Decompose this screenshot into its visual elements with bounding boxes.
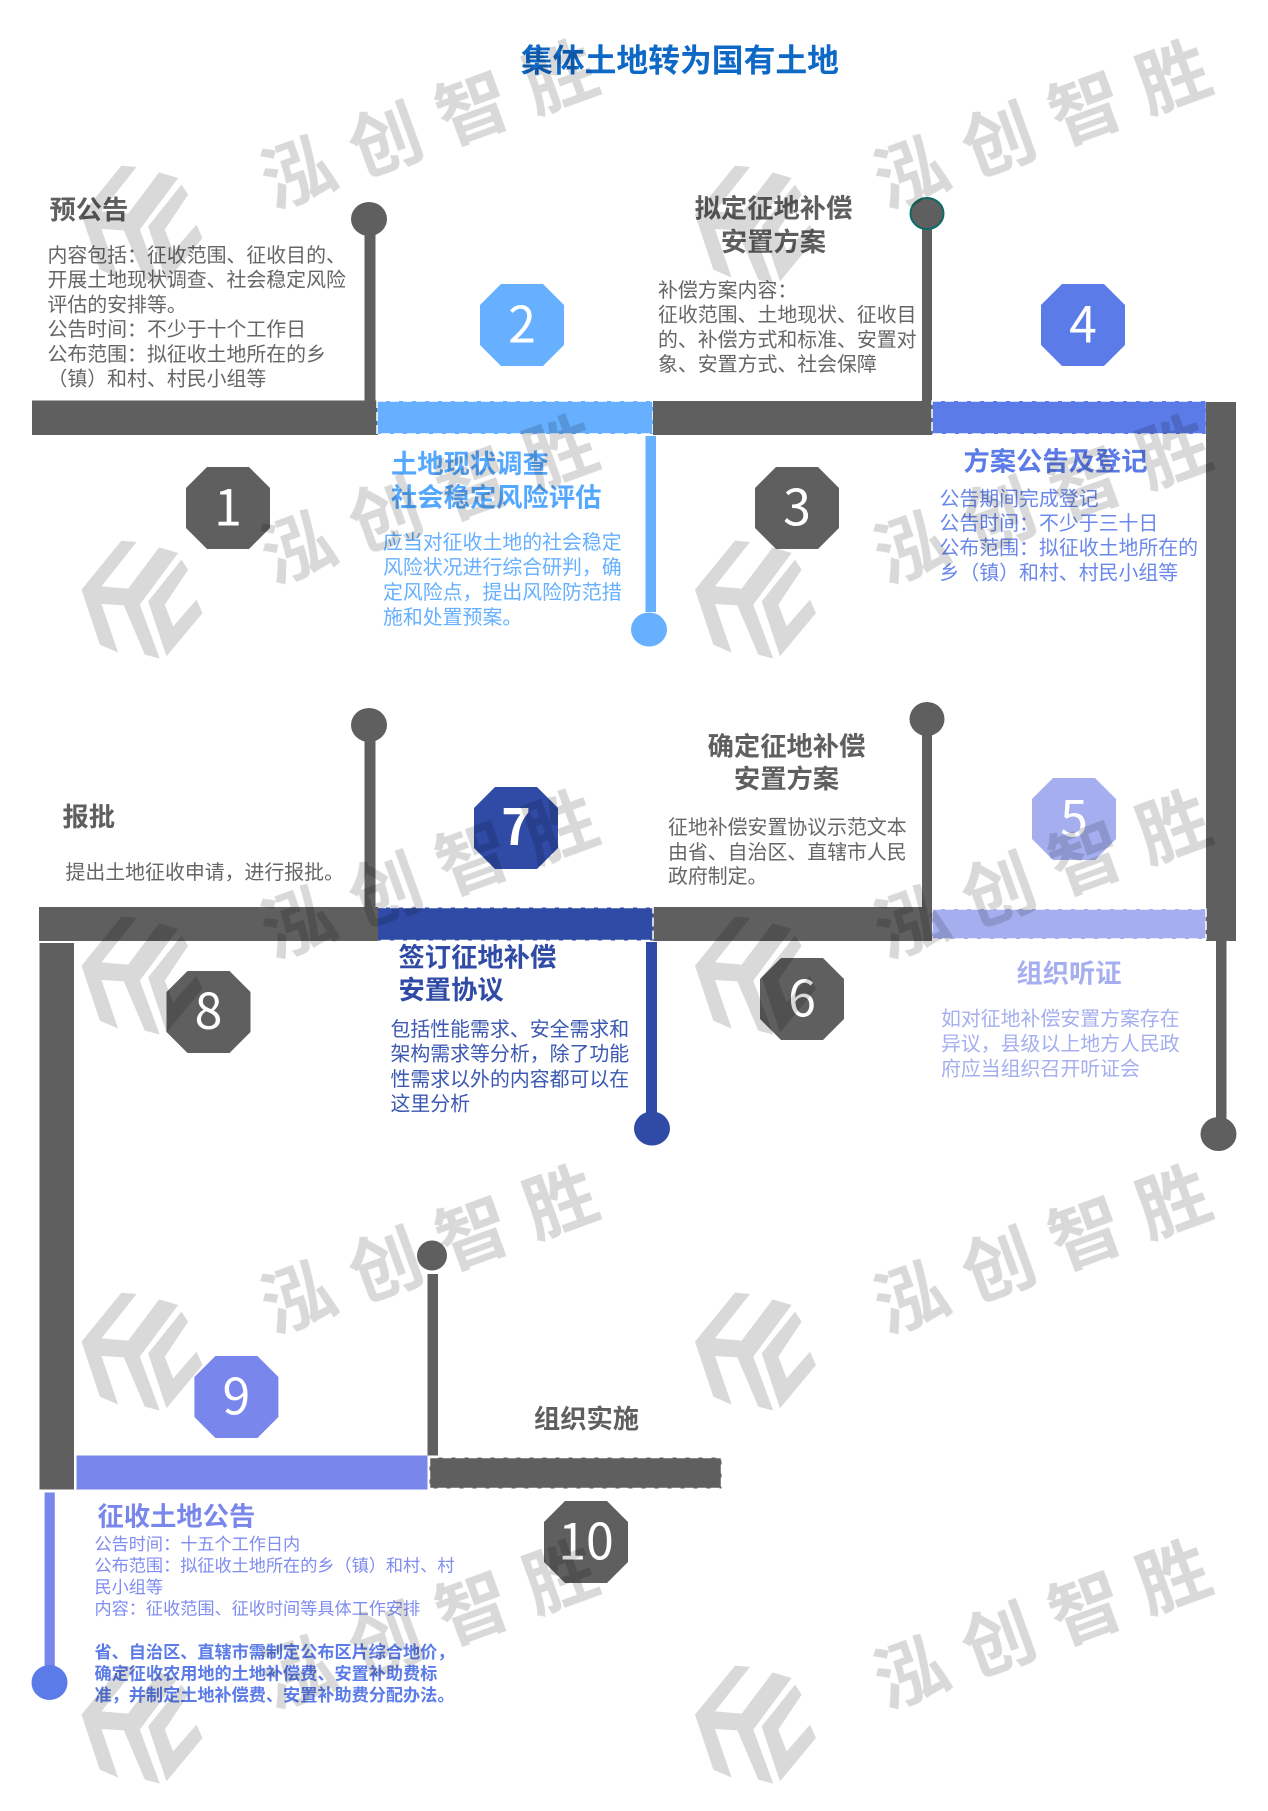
step 6 text: 政府制定。: [668, 865, 767, 888]
step 7 text: 包括性能需求、安全需求和: [390, 1018, 629, 1041]
step 7 bar: [377, 908, 653, 940]
step 4 text: 公告期间完成登记: [940, 488, 1099, 510]
step 10 heading: 组织实施: [534, 1404, 639, 1434]
step 1 bar: [32, 400, 378, 435]
step 2 heading: 土地现状调查: [391, 449, 549, 479]
step 4 text: 乡（镇）和村、村民小组等: [940, 562, 1178, 584]
step 6 badge: 6: [788, 960, 816, 1032]
step 7 pin: [634, 942, 670, 1146]
step 8 badge: 8: [195, 972, 222, 1044]
step 5 heading: 组织听证: [1016, 958, 1122, 988]
watermark overlay: 泓创智胜: [864, 22, 1241, 224]
step 8 badge: [166, 971, 250, 1053]
step 7 badge: 7: [501, 788, 531, 860]
step 4: 方案公告及登记: [932, 284, 1206, 584]
step 3 heading: 安置方案: [721, 227, 826, 257]
watermark overlay: 泓创智胜: [864, 397, 1241, 599]
step 10 bar: [430, 1458, 722, 1488]
step 7 text: 性需求以外的内容都可以在: [390, 1068, 629, 1091]
step 1: 预公告: [32, 195, 387, 549]
step 6 badge: [760, 958, 844, 1040]
step 2 badge: 2: [508, 286, 536, 358]
watermark overlay: 泓创智胜: [864, 1522, 1241, 1724]
watermark overlay: 泓创智胜: [251, 1147, 628, 1349]
step 1 badge: [186, 467, 270, 549]
step 4 heading: 方案公告及登记: [963, 446, 1148, 476]
connector: right vertical bar: [1206, 402, 1236, 941]
step 4 badge: 4: [1069, 286, 1097, 358]
step 5: 组织听证: [932, 402, 1236, 1151]
step 4 badge: [1041, 284, 1125, 366]
step 10 badge: [544, 1501, 628, 1583]
step 3 text: 象、安置方式、社会保障: [658, 353, 877, 376]
step 9 bold note: 确定征收农用地的土地补偿费、安置补助费标: [94, 1664, 437, 1684]
step 9 bar: [76, 1456, 428, 1490]
watermark overlay: 泓创智胜: [251, 772, 628, 974]
step 9 text: 民小组等: [94, 1577, 163, 1597]
step 9 bold note: 准，并制定土地补偿费、安置补助费分配办法。: [94, 1685, 454, 1705]
step 9 text: 内容：征收范围、征收时间等具体工作安排: [94, 1598, 420, 1618]
step 2 text: 施和处置预案。: [383, 606, 522, 629]
step 6 pin: [910, 702, 944, 908]
step 1 text: 内容包括：征收范围、征收目的、: [48, 244, 346, 267]
step 8 text: 提出土地征收申请，进行报批。: [66, 861, 344, 884]
step 9: 征收土地公告: [32, 1356, 454, 1705]
step 3 badge: [755, 467, 839, 549]
step 5 badge: 5: [1060, 780, 1088, 852]
step 5 text: 异议，县级以上地方人民政: [941, 1032, 1180, 1056]
step 7 text: 架构需求等分析，除了功能: [390, 1042, 629, 1066]
connector: left vertical bar: [40, 943, 74, 1490]
step 6 heading: 确定征地补偿: [708, 732, 865, 762]
step 8 heading: 报批: [62, 802, 115, 832]
step 1 pin: [351, 202, 387, 401]
step 8: 报批: [39, 708, 387, 1490]
step 5 pin: [1200, 941, 1236, 1151]
step 3 heading: 拟定征地补偿: [695, 194, 852, 224]
step 9 text: 公告时间：十五个工作日内: [94, 1534, 300, 1554]
step 3 text: 的、补偿方式和标准、安置对: [658, 328, 917, 352]
step 9 pin: [32, 1492, 68, 1700]
step 7 heading: 安置协议: [398, 975, 504, 1005]
step 6 text: 征地补偿安置协议示范文本: [668, 816, 907, 839]
step 4 text: 公告时间：不少于三十日: [940, 512, 1158, 535]
step 9 text: 公布范围：拟征收土地所在的乡（镇）和村、村: [94, 1556, 454, 1576]
step 3 text: 补偿方案内容：: [658, 279, 797, 302]
step 1 heading: 预公告: [50, 195, 128, 225]
step 8 pin: [351, 708, 387, 908]
watermark overlay: 泓创智胜: [864, 1147, 1241, 1349]
step 7 text: 这里分析: [390, 1092, 470, 1116]
step 2 text: 风险状况进行综合研判，确: [383, 556, 622, 579]
step 6 heading: 安置方案: [734, 764, 839, 794]
watermark overlay: 泓创智胜: [251, 22, 628, 224]
step 3 bar: [653, 401, 932, 435]
step 10 badge: 10: [558, 1502, 614, 1574]
step 4 bar: [932, 401, 1206, 434]
step 1 text: 公布范围：拟征收土地所在的乡: [48, 343, 326, 366]
step 6 bar: [653, 907, 932, 941]
step 5 text: 府应当组织召开听证会: [941, 1058, 1140, 1080]
title: 集体土地转为国有土地: [521, 42, 839, 78]
step 5 bar: [932, 909, 1206, 939]
step 7: 签订征地补偿安置协议: [377, 787, 670, 1146]
step 9 badge: [194, 1356, 278, 1438]
step 1 text: 公告时间：不少于十个工作日: [48, 318, 306, 341]
step 4 text: 公布范围：拟征收土地所在的: [940, 536, 1198, 560]
step 2 badge: [480, 284, 564, 366]
step 10 pin: [417, 1240, 447, 1456]
step 6: 确定征地补偿安置方案: [653, 702, 944, 1040]
step 5 text: 如对征地补偿安置方案存在: [941, 1008, 1180, 1030]
step 1 text: 开展土地现状调查、社会稳定风险: [48, 269, 346, 292]
watermark overlay: 泓创智胜: [251, 397, 628, 599]
watermark overlay: 泓创智胜: [251, 1522, 628, 1724]
step 6 text: 由省、自治区、直辖市人民: [668, 841, 907, 864]
step 2 bar: [377, 401, 653, 434]
step 9 badge: 9: [223, 1358, 250, 1430]
step 7 badge: [474, 787, 558, 869]
step 5 badge: [1032, 778, 1116, 860]
step 2 pin: [631, 436, 667, 646]
step 3: 拟定征地补偿安置方案: [653, 194, 944, 549]
step 8 bar: [39, 907, 378, 941]
step 1 badge: 1: [214, 468, 242, 540]
step 3 badge: 3: [783, 468, 811, 540]
step 1 text: 评估的安排等。: [48, 293, 187, 316]
step 9 heading: 征收土地公告: [98, 1502, 255, 1532]
step 1 text: （镇）和村、村民小组等: [48, 368, 266, 390]
step 3 text: 征收范围、土地现状、征收目: [658, 304, 917, 326]
step 9 bold note: 省、自治区、直辖市需制定公布区片综合地价，: [94, 1642, 454, 1662]
step 7 heading: 签订征地补偿: [398, 942, 556, 972]
step 3 pin: [910, 198, 944, 401]
step 10: 组织实施: [417, 1240, 722, 1583]
watermark overlay: 泓创智胜: [864, 772, 1241, 974]
step 2 heading: 社会稳定风险评估: [391, 482, 601, 512]
step 2: 土地现状调查: [377, 284, 667, 646]
step 2 text: 定风险点，提出风险防范措: [383, 581, 622, 604]
step 2 text: 应当对征收土地的社会稳定: [383, 531, 622, 554]
